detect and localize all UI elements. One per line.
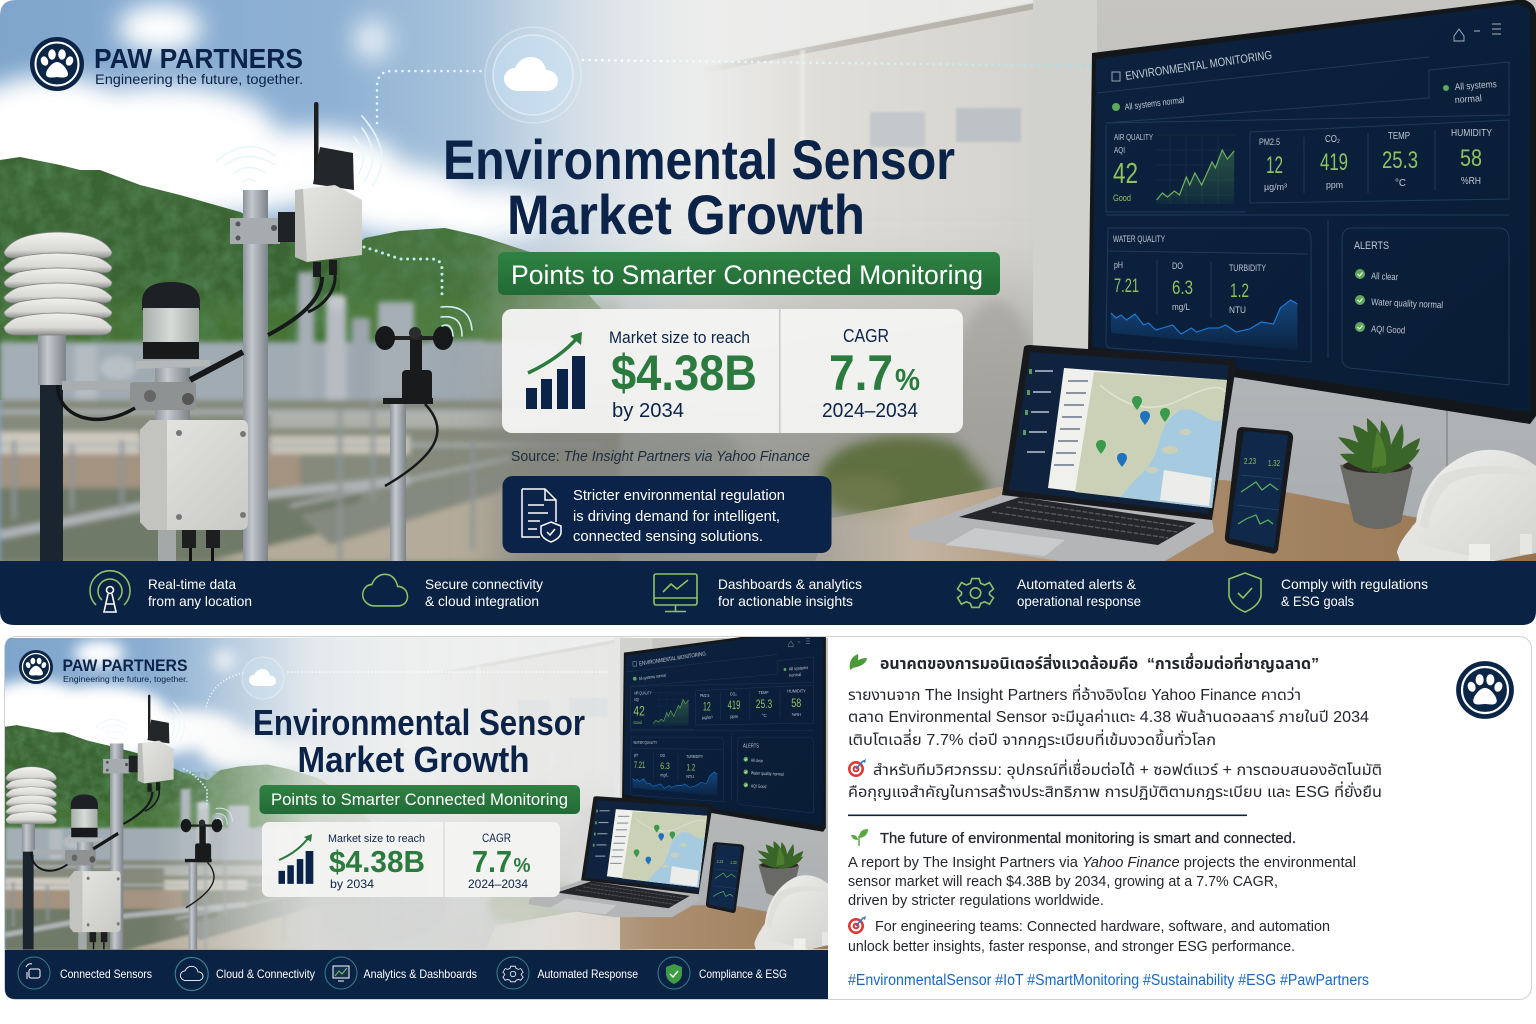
lower dotted lines [184, 672, 609, 805]
source line: Source: The Insight Partners via Yahoo Finance [511, 448, 810, 465]
stats card: CAGR [843, 326, 889, 346]
lower plant [757, 841, 803, 896]
caption panel: Thai copy: คือกุญแจสำคัญในการสร้างประสิทธิภาพ การปฏิบัติตามกฎระเบียบ และ ESG ที่ยั่งยืน [848, 781, 1382, 801]
stats card: 7.7 [829, 345, 893, 401]
caption panel: Thai copy [848, 652, 1382, 801]
lower weather shield and box [6, 767, 121, 949]
paw logo badge [1456, 661, 1514, 719]
lower title [253, 702, 585, 780]
logo: Paw Partners: Engineering the future, together. [95, 71, 303, 87]
regulation callout [502, 476, 832, 553]
feature bar: Secure connectivity [425, 576, 543, 592]
caption panel: Thai copy: อนาคตของการมอนิเตอร์สิ่งแวดล้อมคือ “การเชื่อมต่อที่ชาญฉลาด” [880, 652, 1319, 673]
lower cloud icon [242, 657, 284, 699]
lower hard hat [754, 875, 831, 950]
feature bar: & ESG goals [1281, 593, 1354, 609]
lower stats card [262, 822, 560, 897]
lower subtitle pill: Points to Smarter Connected Monitoring [271, 790, 568, 809]
icon: cloud [363, 574, 408, 606]
caption panel: Thai copy: สำหรับทีมวิศวกรรม: อุปกรณ์ที่เชื่อมต่อได้ + ซอฟต์แวร์ + การตอบสนองอัตโนมัติ [873, 759, 1382, 779]
wall monitor dashboard [1088, 0, 1536, 424]
lower fog overlay [150, 637, 620, 950]
lower stats card: 7.7 [472, 844, 512, 879]
logo: Paw Partners [30, 37, 303, 91]
stats card: Market size to reach [609, 329, 750, 347]
icon: target [848, 759, 866, 777]
icon: tower signal [90, 571, 130, 612]
caption panel: English copy: sensor market will reach $4.38B by 2034, growing at a 7.7% CAGR, [848, 873, 1278, 890]
laptop map and phone [908, 345, 1293, 561]
caption panel: English copy: The future of environmental monitoring is smart and connected. [880, 830, 1296, 847]
regulation callout: is driving demand for intelligent, [573, 509, 780, 525]
lower logo [19, 650, 188, 684]
title: Market Growth [507, 183, 865, 246]
lower icon: growth bars [278, 834, 313, 884]
icon: target [848, 916, 866, 934]
stats card [502, 309, 963, 433]
lower stats card: $4.38B [329, 844, 425, 879]
hashtags: #EnvironmentalSensor #IoT #SmartMonitoring #Sustainability #ESG #PawPartners [848, 972, 1369, 989]
icon: gear [958, 579, 994, 607]
icon: sprout [851, 829, 868, 846]
lower post card frame [4, 636, 1532, 1000]
lower logo: PAW PARTNERS [62, 656, 188, 675]
stats card: by 2034 [612, 400, 684, 422]
caption panel: Thai copy: เติบโตเฉลี่ย 7.7% ต่อปี จากกฎระเบียบที่เข้มงวดขึ้นทั่วโลก [848, 729, 1216, 749]
caption panel: English copy: unlock better insights, faster response, and stronger ESG performance. [848, 938, 1295, 955]
subtitle pill: Points to Smarter Connected Monitoring [511, 260, 983, 290]
feature bar: Comply with regulations [1281, 576, 1428, 592]
feature bar: from any location [148, 593, 252, 609]
feature bar: & cloud integration [425, 593, 539, 609]
caption panel: English copy: For engineering teams: Connected hardware, software, and automation [875, 918, 1330, 935]
lower feature bar: Connected Sensors [60, 967, 152, 981]
lower subtitle pill [260, 785, 580, 814]
lower feature bar: Automated Response [538, 967, 638, 981]
stats card: % [895, 362, 920, 397]
lower icon: connected sensor [18, 957, 50, 989]
caption panel: English copy [848, 829, 1356, 955]
data link dotted lines [364, 60, 1092, 297]
lower banner image [5, 637, 864, 950]
lower logo: Engineering the future, together. [63, 674, 188, 684]
weather shield, lamp sensor and junction box [4, 232, 248, 561]
sensor mast with wireless gateway and wind sensor [216, 102, 472, 561]
feature bar: operational response [1017, 593, 1141, 609]
subtitle pill [498, 252, 1000, 295]
lower title: Market Growth [298, 739, 530, 780]
icon: dashboard monitor [654, 574, 697, 612]
icon: growth bars with arrow [526, 332, 585, 409]
feature bar: Real-time data [148, 576, 236, 592]
lower wall monitor [622, 627, 826, 832]
stats card: 2024–2034 [822, 400, 918, 422]
lower feature bar [5, 950, 828, 999]
caption panel: English copy: A report by The Insight Partners via Yahoo Finance projects the environmental [848, 854, 1356, 871]
regulation callout: Stricter environmental regulation [573, 488, 785, 504]
caption panel: English copy: driven by stricter regulations worldwide. [848, 892, 1104, 909]
lower feature bar: Analytics & Dashboards [364, 967, 477, 981]
stats card: $4.38B [611, 345, 757, 401]
lower stats card: Market size to reach [328, 833, 425, 845]
logo: Paw Partners: PAW PARTNERS [94, 43, 303, 74]
lower feature bar: Cloud & Connectivity [216, 967, 315, 981]
white hard hat [1397, 450, 1536, 561]
top banner photo background [0, 0, 1536, 630]
caption panel: Thai copy: ตลาด Environmental Sensor จะมีมูลค่าแตะ 4.38 พันล้านดอลลาร์ ภายในปี 2034 [848, 708, 1369, 726]
icon: document with shield [522, 489, 561, 542]
lower icon: gear [497, 957, 529, 989]
lower stats card: 2024–2034 [468, 877, 528, 891]
feature bar [0, 561, 1536, 625]
icon: leaf [850, 654, 867, 670]
title: Environmental Sensor [443, 128, 955, 191]
feature bar: for actionable insights [718, 593, 853, 609]
lower laptop and phone [528, 796, 744, 917]
feature bar: Dashboards & analytics [718, 576, 862, 592]
lower stats card: by 2034 [330, 877, 374, 891]
potted plant [1338, 418, 1420, 529]
lower icon: cloud [175, 958, 208, 990]
caption panel: Thai copy: รายงานจาก The Insight Partners ที่อ้างอิงโดย Yahoo Finance คาดว่า [848, 684, 1301, 704]
lower stats card: % [514, 855, 531, 877]
lower stats card: CAGR [482, 833, 511, 845]
title [443, 128, 955, 246]
icon: compliance shield [1229, 573, 1261, 612]
lower icon: green shield [658, 957, 690, 989]
lower feature bar: Compliance & ESG [699, 967, 787, 981]
regulation callout: connected sensing solutions. [573, 529, 763, 545]
feature bar: Automated alerts & [1017, 576, 1137, 592]
cloud icon with halo [485, 27, 581, 123]
lower title: Environmental Sensor [253, 702, 585, 743]
lower sensor mast [96, 695, 233, 949]
lower icon: analytics [325, 957, 357, 989]
